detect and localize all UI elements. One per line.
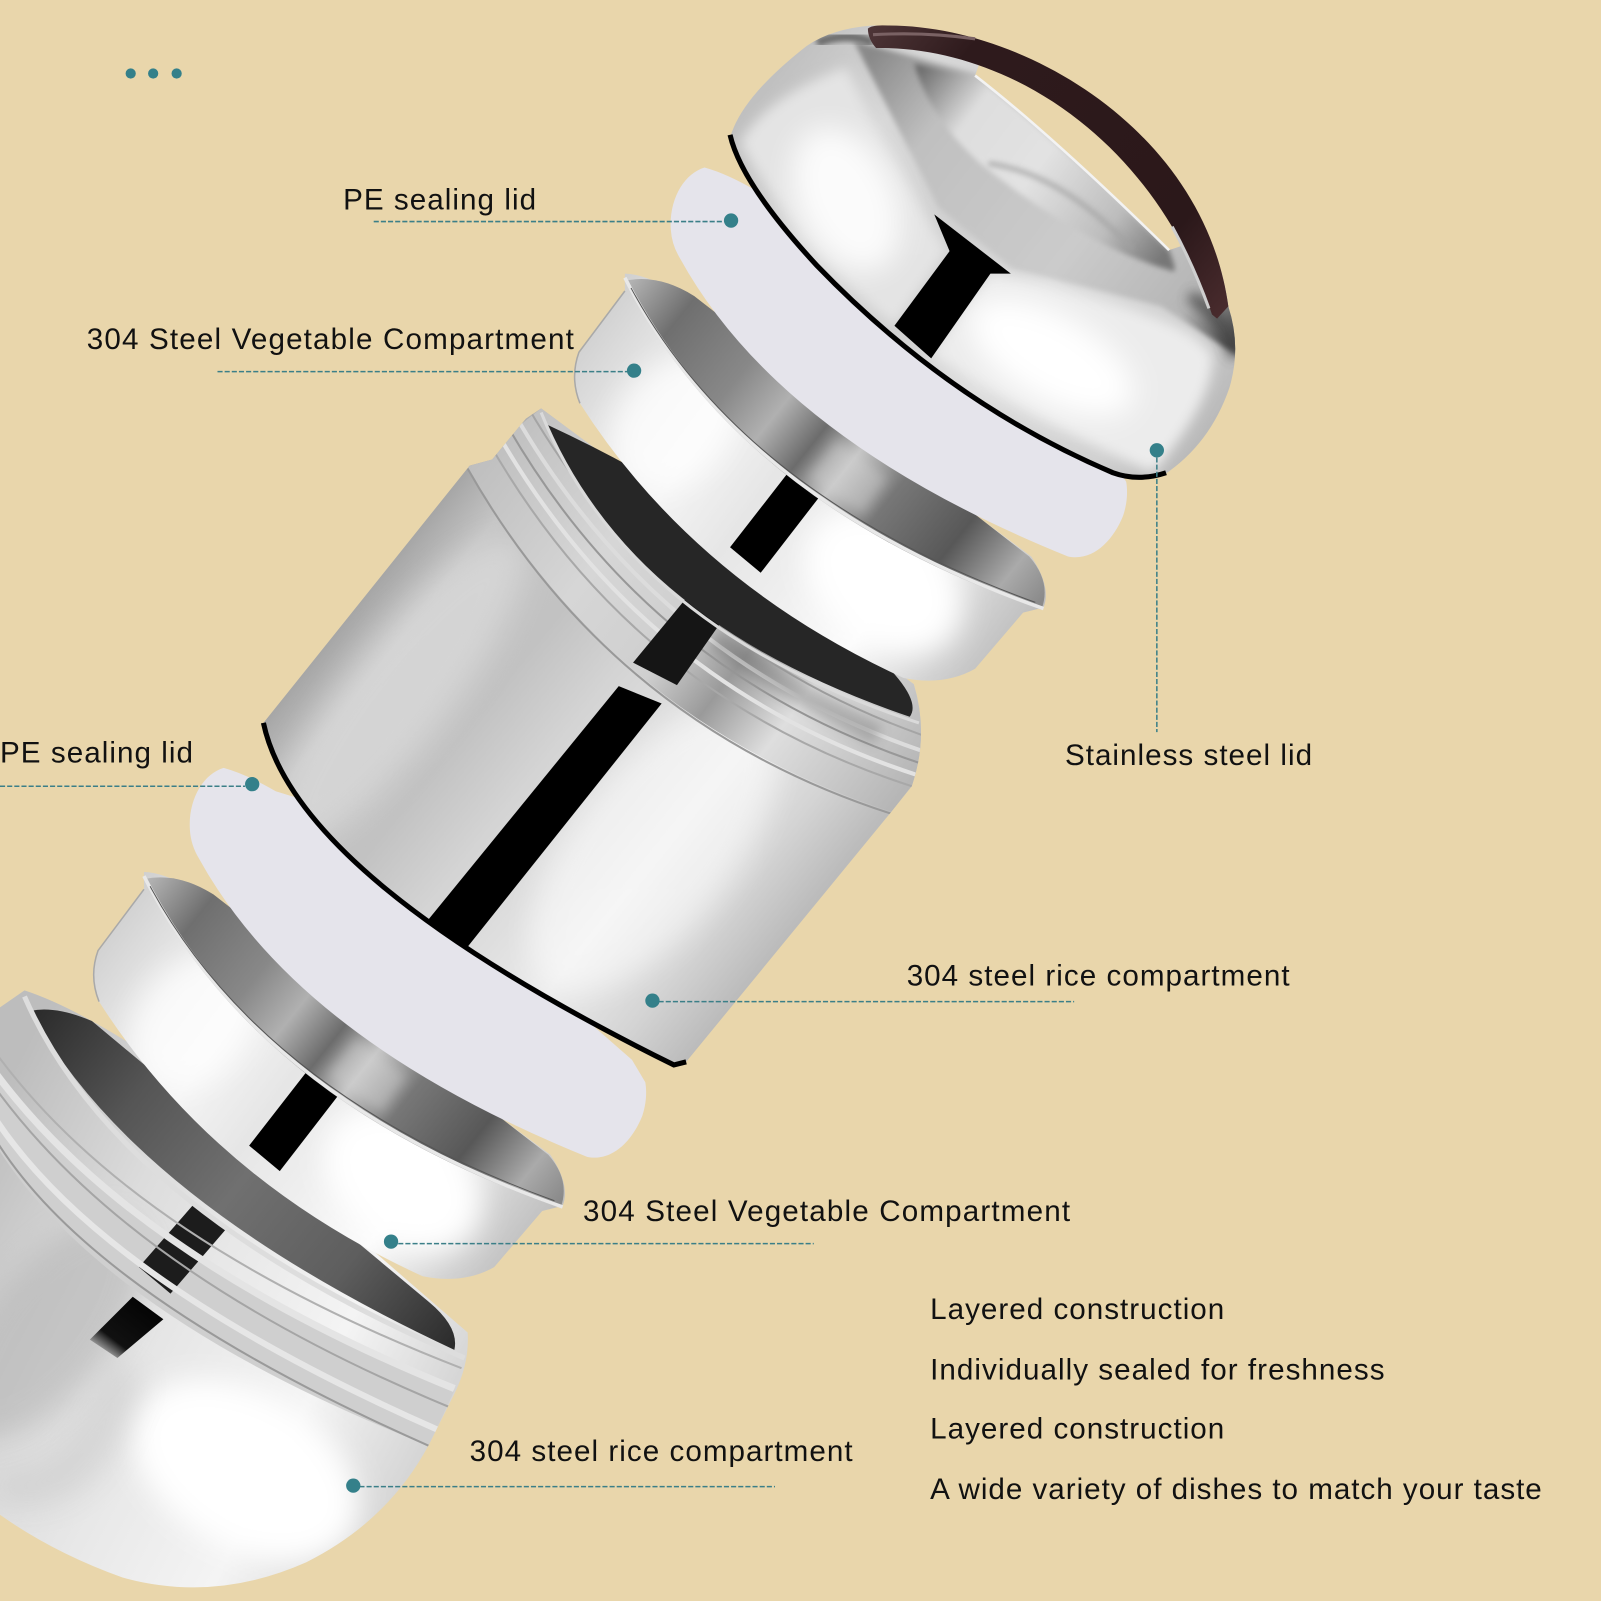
callout: 304 Steel Vegetable Compartment (lower): 304 Steel Vegetable Compartment	[583, 1195, 1071, 1228]
callout: 304 Steel Vegetable Compartment (upper): 304 Steel Vegetable Compartment	[87, 323, 575, 356]
callout: Stainless steel lid	[1065, 443, 1312, 772]
neck grooves	[468, 408, 923, 812]
lower PE sealing ring	[190, 768, 646, 1158]
jar opening	[547, 425, 913, 717]
callout: 304 Steel Vegetable Compartment (lower)	[384, 1195, 1071, 1249]
feature list: A wide variety of dishes to match your taste	[930, 1473, 1542, 1506]
feature list: Layered construction	[930, 1293, 1224, 1326]
window under handle	[975, 61, 1184, 250]
callout: 304 steel rice compartment (upper)	[645, 959, 1290, 1008]
second vegetable compartment	[94, 872, 565, 1282]
lid seal line	[730, 135, 1166, 477]
callout: 304 steel rice compartment (upper): 304 steel rice compartment	[907, 959, 1290, 992]
bottom seal line	[263, 723, 686, 1065]
black stripe on the body	[425, 686, 662, 956]
first vegetable compartment	[575, 274, 1046, 684]
upper rice compartment	[239, 398, 947, 1065]
brown handle	[868, 25, 1228, 319]
stainless steel lid with handle	[730, 25, 1241, 478]
callout: 304 Steel Vegetable Compartment (upper)	[87, 323, 641, 378]
right white panel	[931, 274, 1212, 473]
upper PE sealing ring	[671, 167, 1127, 557]
callout: 304 steel rice compartment (lower)	[346, 1435, 853, 1493]
inner lens	[914, 63, 1175, 271]
callout: PE sealing lid (upper)	[343, 183, 738, 228]
stripe on the jar body	[90, 1297, 163, 1358]
stripe on the neck	[139, 1203, 227, 1294]
feature list: Layered construction	[930, 1413, 1224, 1446]
callout: PE sealing lid (upper): PE sealing lid	[343, 183, 536, 216]
decorative three dots icon	[126, 68, 182, 79]
lid upper band	[854, 41, 1241, 357]
bottom rice compartment	[0, 990, 468, 1598]
reflected stripe on the neck	[633, 600, 719, 686]
callout: 304 steel rice compartment (lower): 304 steel rice compartment	[470, 1435, 853, 1468]
black stripe	[894, 214, 1011, 358]
callout: PE sealing lid (lower): PE sealing lid	[0, 737, 193, 770]
callout: Stainless steel lid: Stainless steel lid	[1065, 739, 1312, 772]
callout: PE sealing lid (lower)	[0, 737, 259, 791]
feature list	[930, 1293, 1542, 1506]
left white panel	[740, 67, 947, 326]
feature list: Individually sealed for freshness	[930, 1353, 1385, 1386]
